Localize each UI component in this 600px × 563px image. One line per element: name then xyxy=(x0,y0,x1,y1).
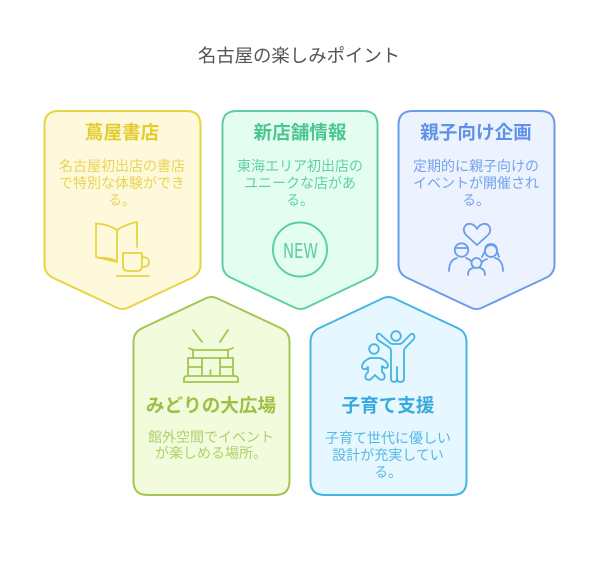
text: 子育て支援 description: 設計が充実してい xyxy=(332,447,444,463)
text: 子育て支援 description: る。 xyxy=(374,464,402,480)
title: 名古屋の楽しみポイント xyxy=(198,45,400,66)
text: 蔦屋書店 description: る。 xyxy=(108,192,136,208)
text: みどりの大広場 description: 館外空間でイベント xyxy=(148,429,274,445)
icon: family with heart xyxy=(449,224,503,275)
text: 新店舗情報 description: る。 xyxy=(286,192,314,208)
icon: NEW badge: NEW xyxy=(283,239,318,263)
icon: book and coffee cup xyxy=(96,222,149,276)
text: 蔦屋書店 description: 名古屋初出店の書店 xyxy=(59,158,185,174)
panel: 親子向け企画 xyxy=(398,111,554,309)
text: 新店舗情報 description: ユニークな店があ xyxy=(244,175,356,191)
text: 親子向け企画 description: る。 xyxy=(462,192,490,208)
panel: みどりの大広場 xyxy=(134,297,290,495)
heading: 親子向け企画: 親子向け企画 xyxy=(420,122,532,143)
text: 子育て支援 description: 子育て世代に優しい xyxy=(325,430,451,446)
icon: NEW badge xyxy=(273,222,327,276)
text: 新店舗情報 description: 東海エリア初出店の xyxy=(237,158,363,174)
text: 蔦屋書店 description: で特別な体験ができ xyxy=(59,175,185,191)
panel: 子育て支援 xyxy=(310,297,466,495)
panel: 新店舗情報 xyxy=(222,111,378,309)
heading: 新店舗情報: 新店舗情報 xyxy=(254,122,347,143)
heading: みどりの大広場: みどりの大広場 xyxy=(146,395,276,416)
text: 親子向け企画 description: イベントが開催され xyxy=(413,175,539,191)
heading: 子育て支援: 子育て支援 xyxy=(342,395,435,416)
text: 親子向け企画 description: 定期的に親子向けの xyxy=(413,158,539,174)
panel: 蔦屋書店 xyxy=(44,111,200,309)
icon: plaza building xyxy=(184,330,238,382)
heading: 蔦屋書店: 蔦屋書店 xyxy=(85,122,159,143)
icon: parent and child xyxy=(362,331,414,382)
text: みどりの大広場 description: が楽しめる場所。 xyxy=(155,445,267,461)
